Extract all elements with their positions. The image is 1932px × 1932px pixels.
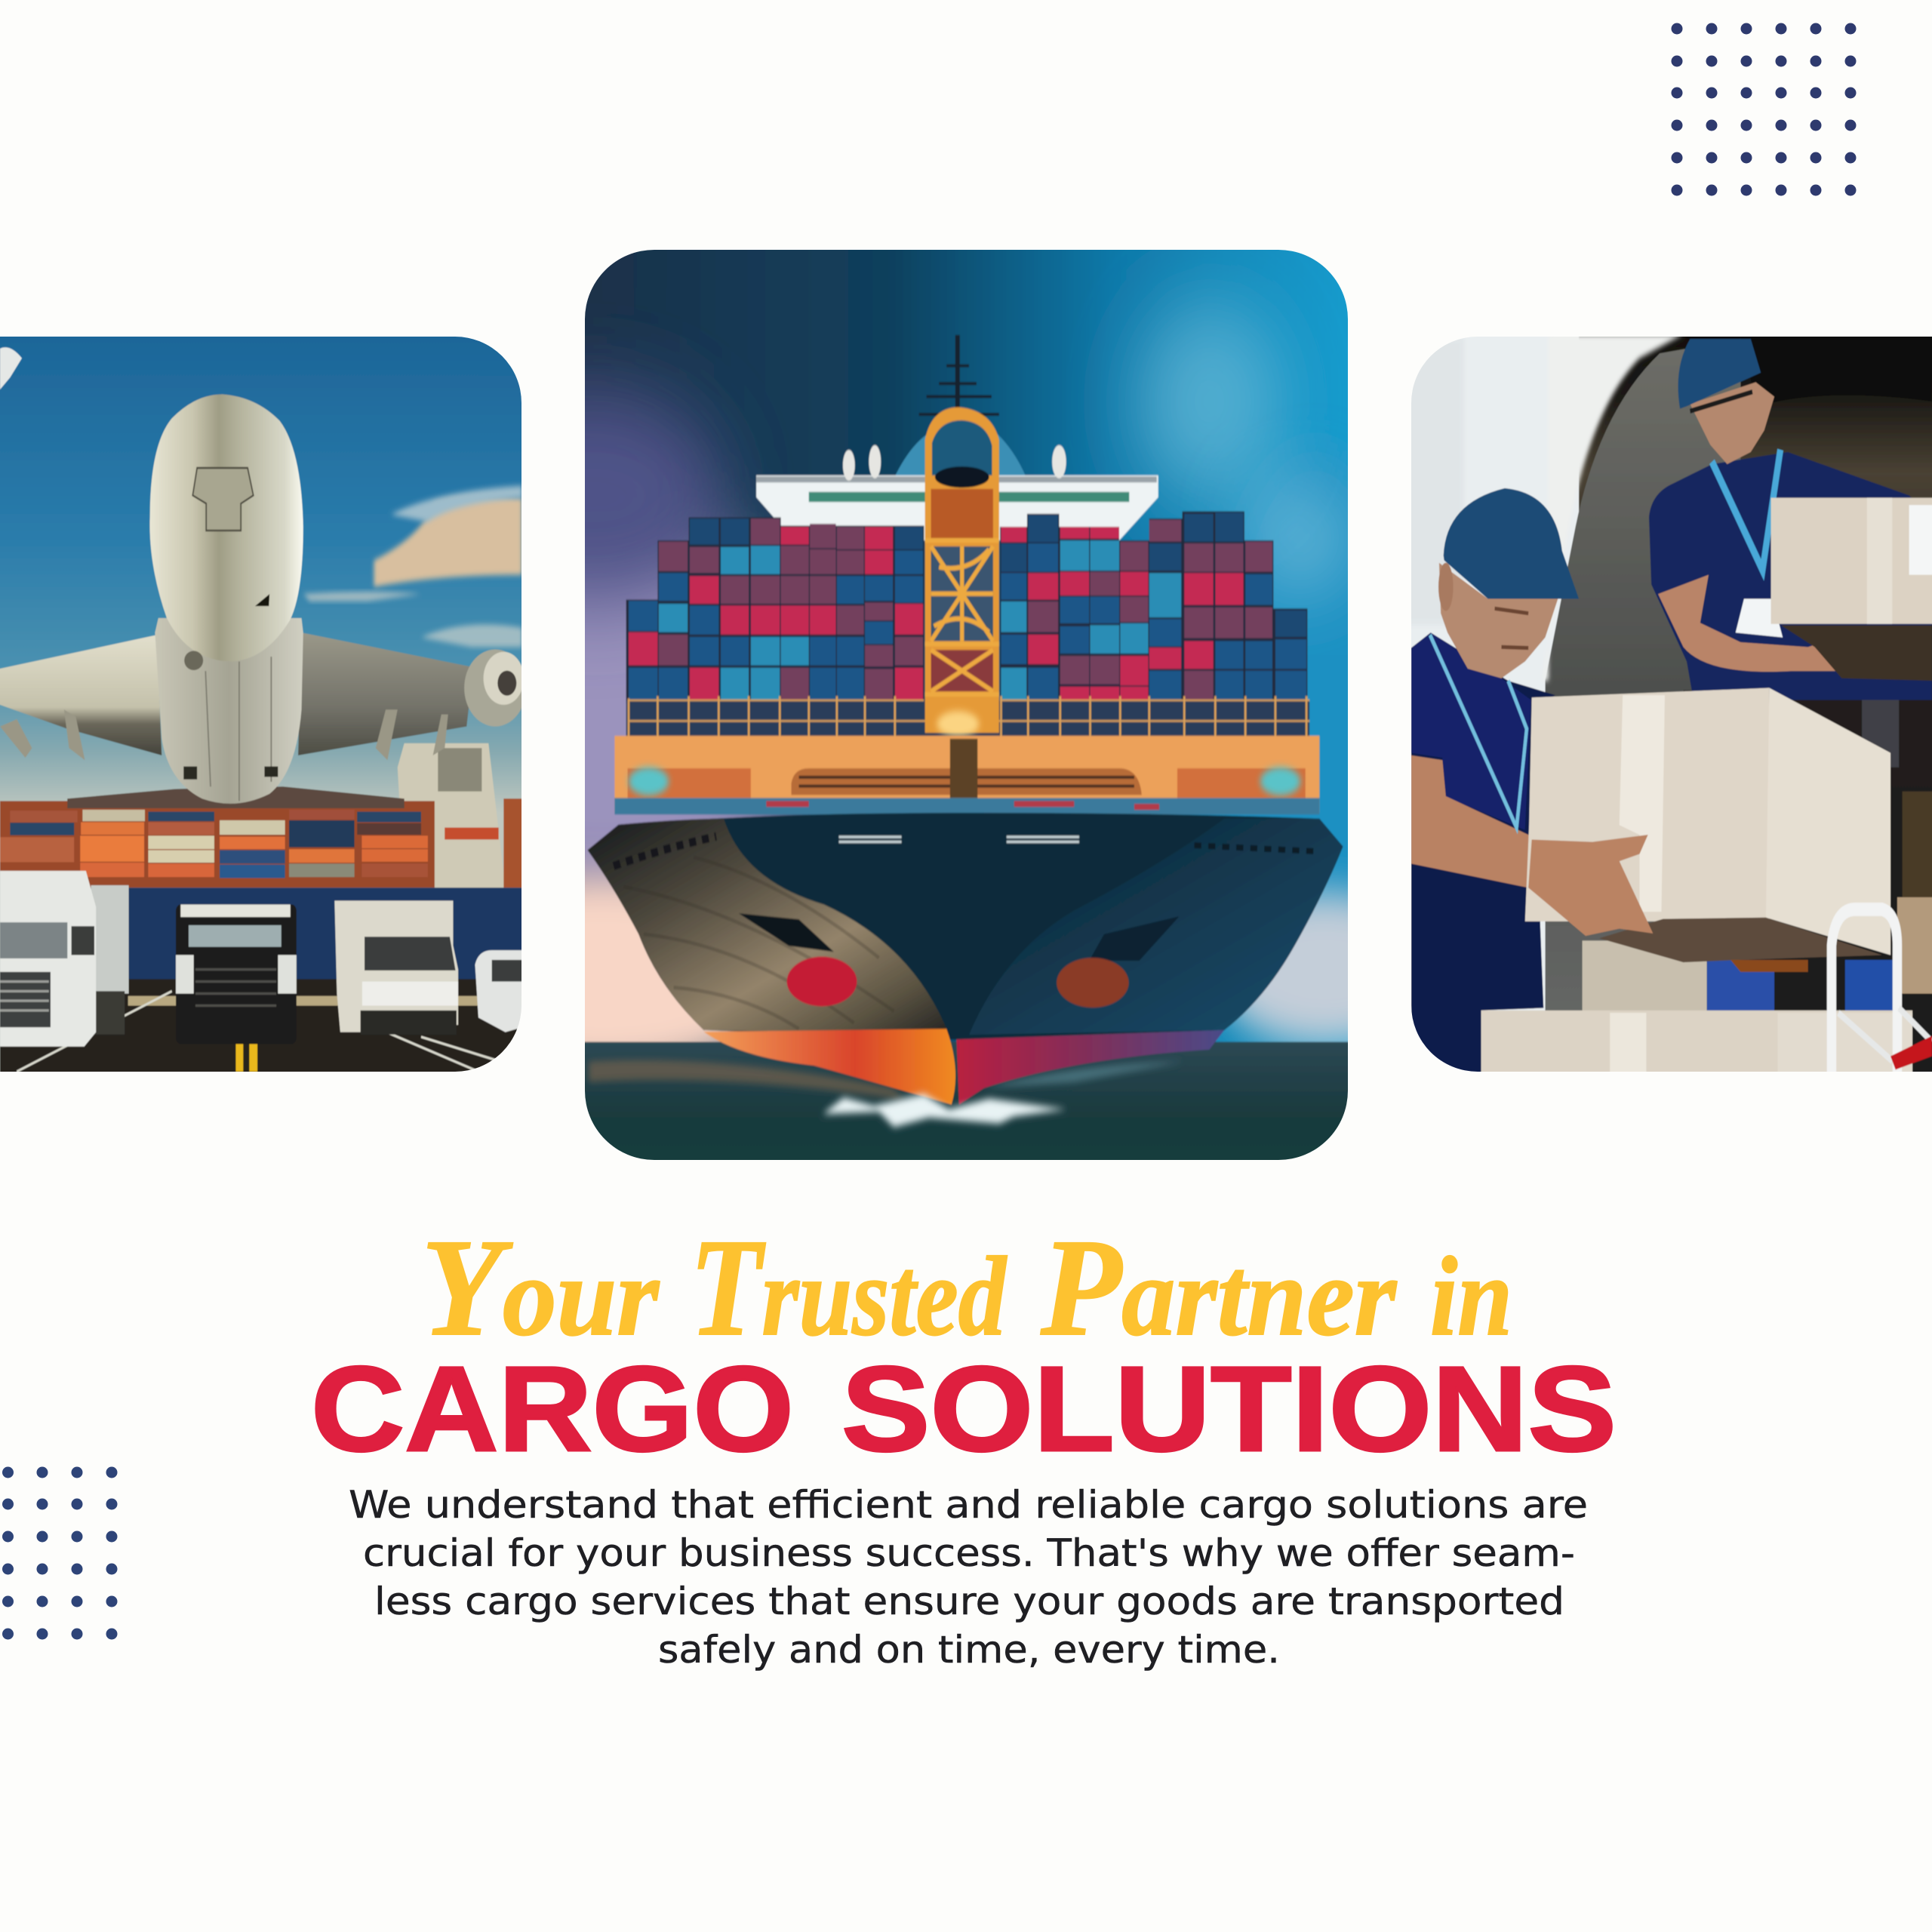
body text: safely and on time, every time. (658, 1628, 1280, 1672)
workers photo background (1404, 320, 1932, 1090)
back worker (1649, 339, 1932, 700)
truck left (0, 871, 129, 1047)
dot pattern: top right (1671, 23, 1857, 196)
body text: less cargo services that ensure your goods are transported (374, 1580, 1564, 1623)
panel: container ship photo (585, 250, 1348, 1160)
plane photo sky (0, 320, 539, 1090)
truck right (334, 900, 458, 1035)
ship deck railing (626, 696, 1309, 737)
heading: main line: CARGO (311, 1341, 794, 1476)
body text: We understand that efficient and reliable cargo solutions are (349, 1483, 1588, 1527)
ship sky (585, 250, 1348, 1043)
heading: script line: Partner (1040, 1211, 1398, 1365)
dot pattern: lower left (2, 1467, 118, 1639)
bow wave foam (823, 1094, 1066, 1127)
heading: script line (421, 1211, 1512, 1365)
panel: plane and trucks photo (0, 320, 539, 1090)
ship sea and bow wave (585, 1041, 1348, 1160)
large cardboard box (1525, 688, 1890, 972)
van right (475, 950, 522, 1032)
heading: script line: Trusted (690, 1211, 1008, 1365)
heading: main line: SOLUTIONS (841, 1341, 1617, 1476)
heading: script line: Your (421, 1211, 660, 1365)
ship orange deck (614, 736, 1319, 814)
stacked containers behind plane (0, 743, 524, 888)
ship containers (626, 512, 1307, 709)
quay wall and road (0, 888, 528, 1085)
body text (349, 1483, 1588, 1672)
plane (0, 394, 526, 804)
panel: delivery workers photo (1404, 320, 1932, 1090)
body text: crucial for your business success. That's why we offer seam- (363, 1531, 1575, 1575)
lower cardboard box and hand truck (1481, 909, 1932, 1078)
ship hull (588, 813, 1343, 1105)
front worker (1411, 488, 1653, 1085)
ship mast (919, 335, 999, 414)
truck centre (176, 905, 297, 1044)
ship bridge tower (925, 408, 999, 737)
ship superstructure (756, 428, 1158, 540)
heading: script line: in (1430, 1234, 1512, 1359)
heading: main line (311, 1341, 1617, 1476)
